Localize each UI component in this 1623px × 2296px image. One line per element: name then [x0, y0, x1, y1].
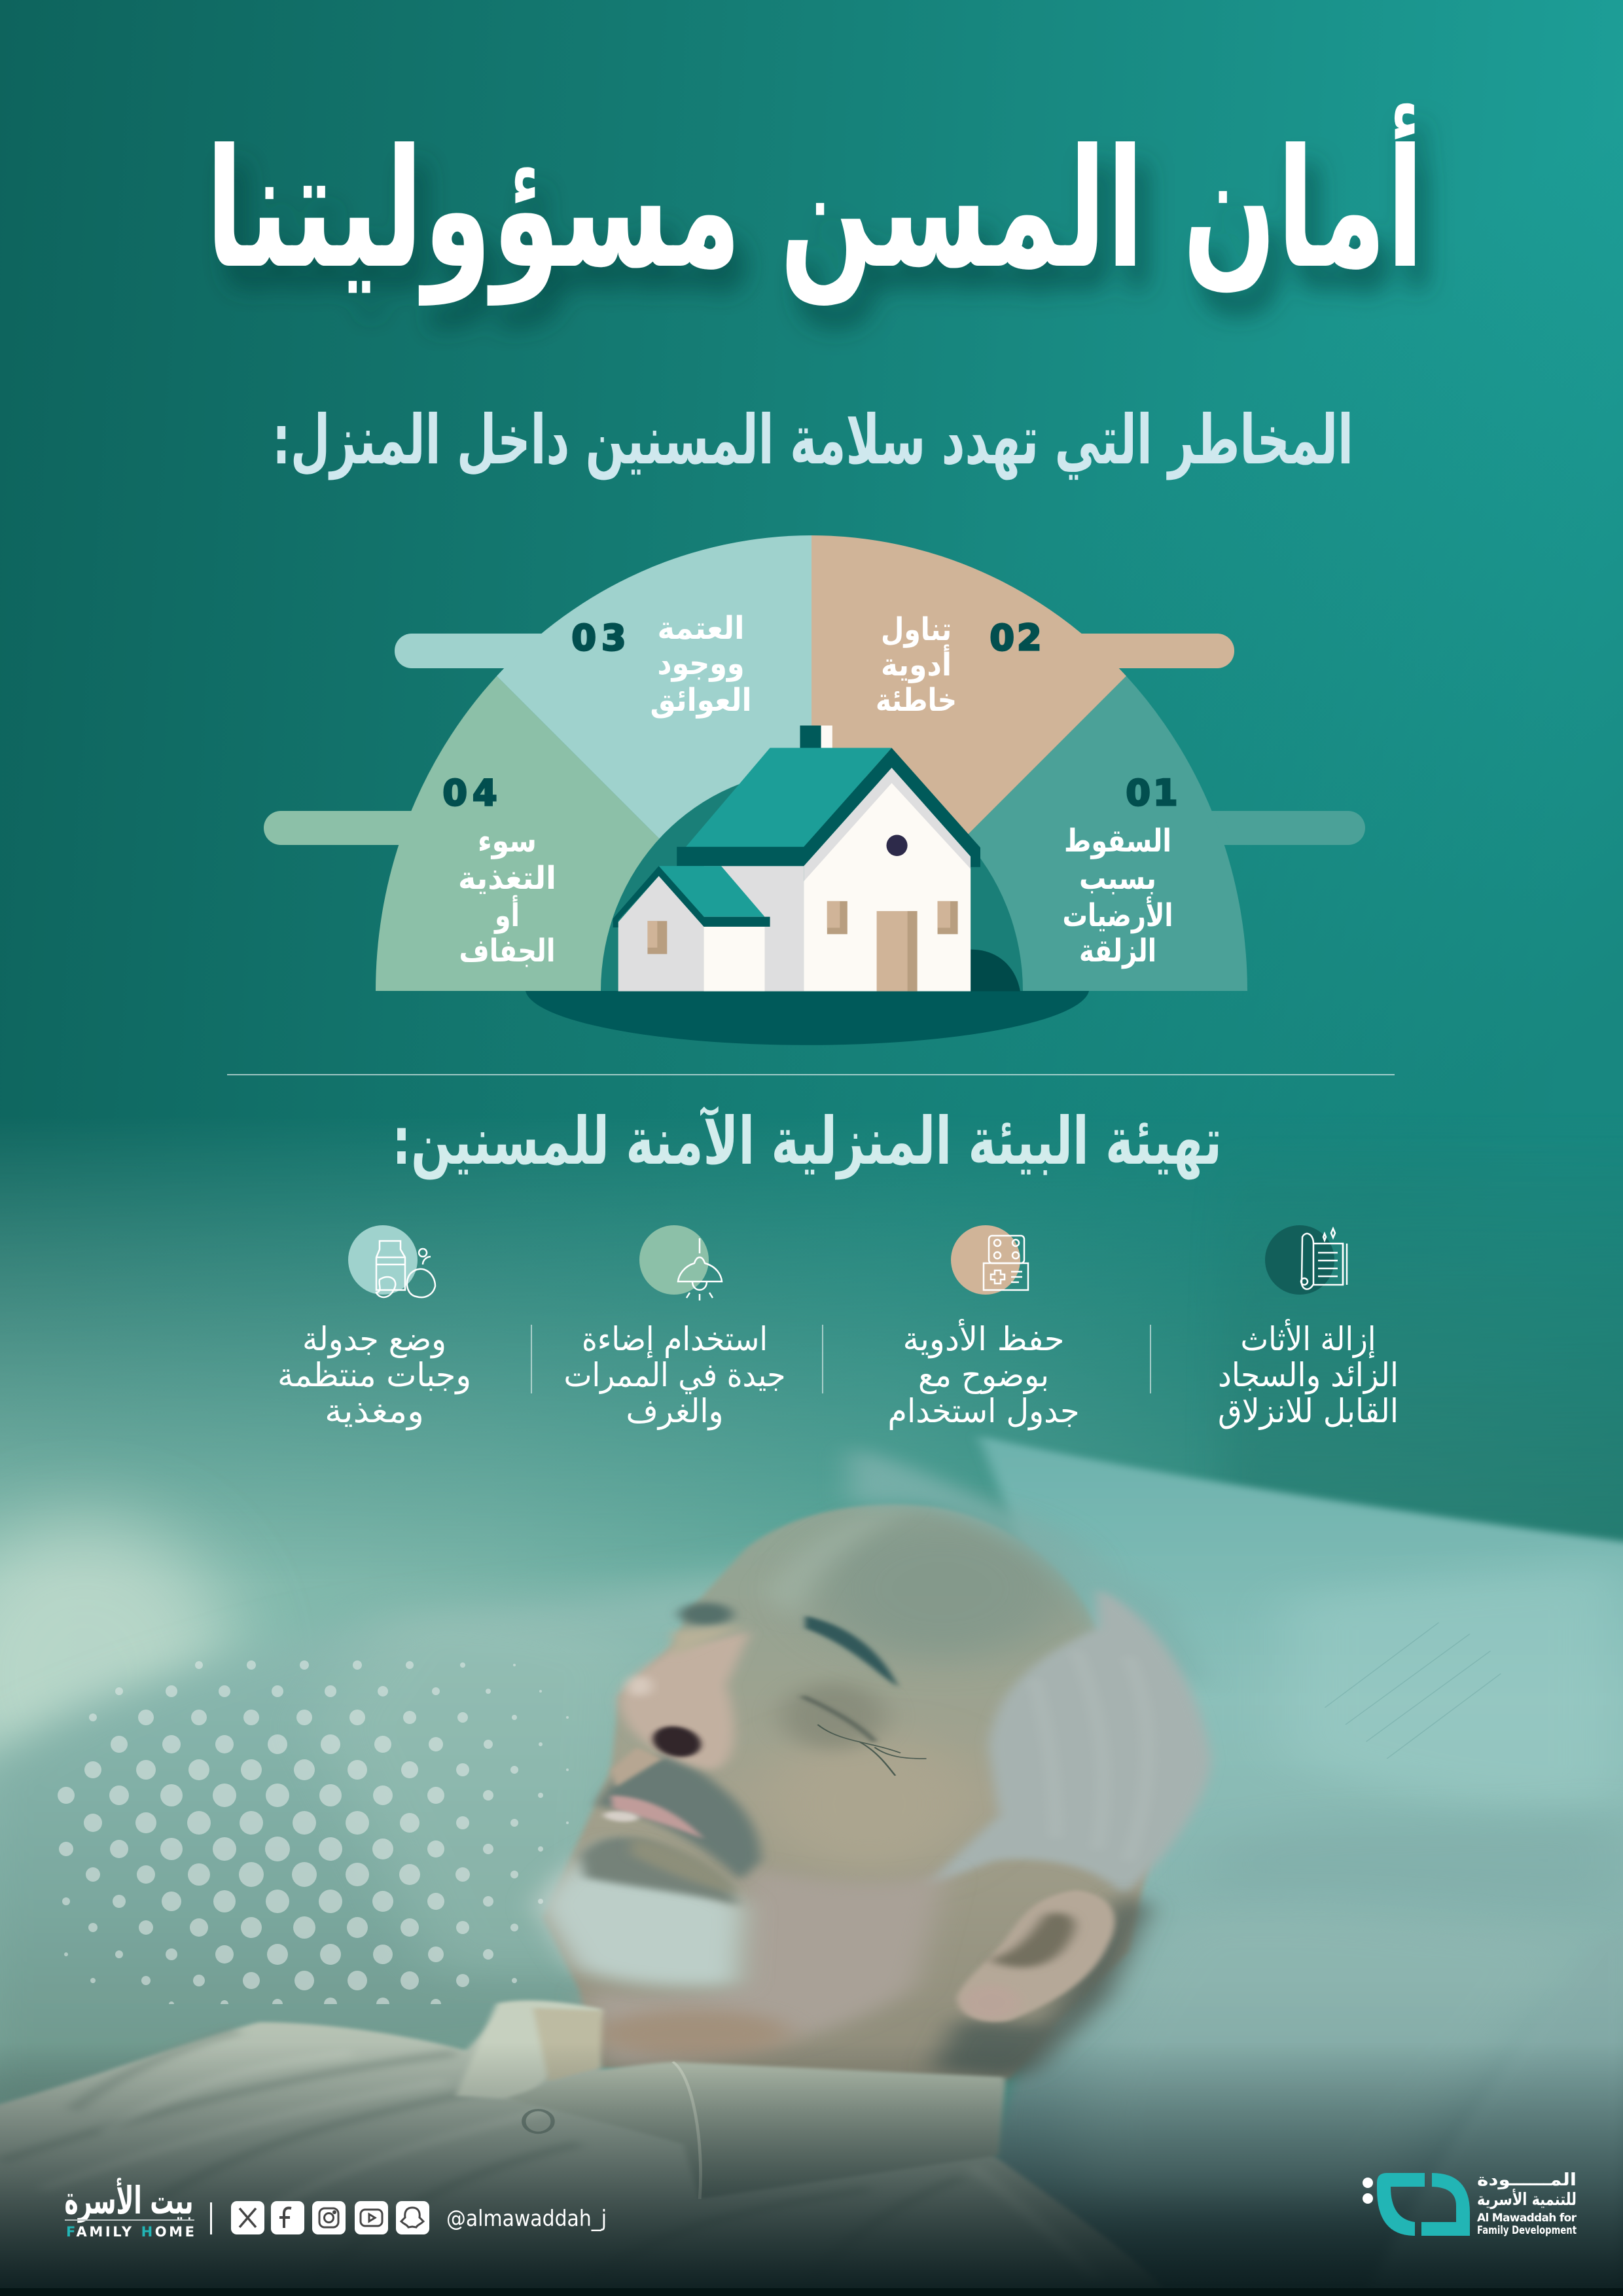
bar 01: [1169, 811, 1365, 845]
bottom dark fade: [0, 2042, 1623, 2288]
icon: rug: [1265, 1225, 1347, 1295]
nostril: [644, 1722, 710, 1761]
text: remove furniture: القابل للانزلاق: [1218, 1392, 1399, 1430]
icon: instagram: [312, 2201, 346, 2234]
bush: [971, 950, 1020, 992]
icon: youtube: [355, 2201, 388, 2234]
label 04: التغذية: [458, 860, 556, 897]
main gable shadow: [804, 768, 971, 992]
far eye socket: [673, 1625, 745, 1657]
neck shadow behind ear: [931, 1895, 1149, 2079]
collar button: [524, 2110, 553, 2132]
label 04: الجفاف: [459, 933, 555, 969]
pillow fold light: [1067, 1910, 1594, 2200]
door: [877, 911, 918, 992]
number 01: 01: [1126, 772, 1181, 814]
text: meals: وجبات منتظمة: [277, 1356, 471, 1395]
hair highlights: [1035, 1651, 1148, 1861]
forehead tone: [813, 1518, 1071, 1659]
eye socket: [781, 1682, 885, 1750]
chimney light side: [821, 726, 832, 748]
footer divider: [210, 2202, 212, 2234]
collar fold: [673, 2062, 701, 2199]
far brow: [679, 1603, 733, 1625]
window left small: [647, 921, 667, 954]
text: remove furniture: [1218, 1319, 1399, 1430]
neck warm: [595, 2010, 792, 2057]
cheek tone: [760, 1736, 978, 1872]
ear: [957, 1890, 1115, 2022]
logo: family home: [64, 2178, 194, 2240]
chin skin patch: [632, 1838, 737, 1895]
window main left: [827, 901, 847, 934]
skin inside collar: [533, 2008, 602, 2082]
text: lighting: والغرف: [626, 1392, 724, 1431]
segment 04: [376, 676, 812, 991]
text: remove furniture: الزائد والسجاد: [1218, 1356, 1399, 1395]
white beard chin: [536, 1844, 745, 1988]
left collar: [455, 2000, 602, 2100]
text: remove furniture: إزالة الأثاث: [1241, 1319, 1376, 1359]
middle wall white: [704, 927, 765, 992]
main roof: [686, 748, 892, 847]
moustache: [595, 1753, 760, 1880]
label 02: تناول: [881, 611, 952, 648]
logo name: للتنمية الأسرية: [1477, 2189, 1577, 2210]
window glow: [0, 1518, 236, 1833]
text: lighting: استخدام إضاءة: [582, 1320, 768, 1359]
house illustration: [613, 726, 1020, 992]
chimney: [800, 726, 821, 748]
label 03: العتمة: [657, 610, 745, 647]
lips: [611, 1795, 704, 1839]
small roof: [659, 866, 765, 917]
text: lighting: جيدة في الممرات: [564, 1356, 785, 1394]
main collar: [505, 2062, 1004, 2199]
logo: family home: بيت الأسرة: [64, 2178, 194, 2223]
ear lobe pink: [963, 1985, 1020, 2019]
blanket highlight fold: [310, 1608, 642, 1974]
label 01: [1063, 823, 1173, 969]
head skin base: [543, 1504, 1180, 2079]
social handle: @almawaddah_j: [446, 2206, 607, 2232]
bottom strip: [0, 2288, 1623, 2296]
photo: sleeping elderly man: [0, 1047, 1623, 2296]
main roof edge: [677, 748, 980, 867]
label 03: [651, 610, 751, 719]
label 01: السقوط: [1064, 823, 1171, 859]
second pillow lower right: [1366, 1926, 1623, 2296]
label 04: سوء: [478, 823, 537, 859]
pillow wrinkles: [1325, 1623, 1501, 1759]
inner teal dome: [601, 770, 1023, 991]
round window: [886, 834, 908, 856]
photo backdrop wall: [0, 1143, 1623, 2126]
nose: [619, 1631, 751, 1770]
bar 04: [264, 811, 460, 845]
pillow highlight: [1283, 1560, 1623, 1807]
side hair: [921, 1588, 1211, 1895]
logo name: [1477, 2170, 1577, 2237]
logo dots: [1363, 2178, 1373, 2204]
main gable: [804, 783, 971, 992]
icon: lamp: [639, 1225, 722, 1300]
shirt: [0, 2008, 1169, 2296]
curtain shadow: [1255, 1462, 1452, 1512]
heading: safe home: تهيئة البيئة المنزلية الآمنة للمسنين:: [392, 1103, 1222, 1180]
logo name: Family Development: [1477, 2224, 1577, 2237]
number 02: 02: [990, 617, 1044, 658]
window main right: [938, 901, 958, 934]
number 04: 04: [442, 772, 503, 814]
small roof edge: [613, 866, 770, 927]
icon: facebook: [271, 2201, 304, 2234]
logo: family home: FAMILY HOME: [66, 2224, 194, 2240]
lower lip light: [602, 1810, 640, 1823]
icon: X: [231, 2201, 264, 2234]
label 02: أدوية: [881, 644, 952, 683]
column dividers: [531, 1325, 1151, 1393]
label 03: ووجود: [657, 645, 745, 682]
label 01: الزلقة: [1079, 933, 1156, 969]
shirt fold lights: [41, 2053, 1097, 2280]
small gable: [618, 876, 704, 992]
segment 01: [812, 676, 1247, 991]
logo: Al Mawaddah: [1363, 2170, 1577, 2237]
middle wall: [704, 866, 804, 992]
temple light: [766, 1503, 911, 1623]
upper lip near: [611, 1748, 662, 1787]
bar 02: [1038, 634, 1234, 668]
side hair wisps: [849, 1447, 1211, 1691]
inner ear: [988, 1913, 1075, 1967]
label 01: بسبب: [1079, 860, 1156, 897]
stubble under lip: [580, 1837, 740, 1906]
segment 02: [812, 535, 1126, 991]
diagram: home risks semicircle: [264, 535, 1365, 1045]
label 02: [876, 611, 957, 719]
label 03: العوائق: [651, 682, 751, 719]
logo mark right: [1421, 2173, 1470, 2236]
label 04: [458, 823, 556, 969]
text: medicine storage: [887, 1319, 1080, 1431]
label 01: الأرضيات: [1063, 896, 1173, 934]
icon: medicine: [951, 1225, 1028, 1295]
eyelid: [802, 1696, 874, 1742]
text: medicine storage: بوضوح مع: [918, 1356, 1049, 1395]
text: lighting: [564, 1320, 785, 1431]
icon: food: [348, 1225, 435, 1297]
pillow fold shadow: [1211, 1810, 1623, 1906]
nose tip highlight: [627, 1676, 652, 1696]
icon: snapchat: [396, 2201, 429, 2234]
text: medicine storage: جدول استخدام: [887, 1392, 1080, 1431]
shirt folds: [0, 2031, 963, 2291]
ground shadow: [526, 991, 1089, 1045]
eyebrow: [805, 1616, 899, 1688]
label 04: أو: [493, 895, 520, 934]
number 03: 03: [571, 617, 632, 658]
logo name: Al Mawaddah for: [1477, 2212, 1577, 2225]
text: medicine storage: حفظ الأدوية: [903, 1319, 1064, 1359]
segment 03: [497, 535, 812, 991]
eye wrinkles: [817, 1725, 927, 1776]
text: meals: ومغذية: [325, 1392, 424, 1431]
logo mark left: [1377, 2173, 1425, 2236]
text: meals: [277, 1320, 471, 1431]
blurred blanket left: [0, 1566, 787, 2121]
divider: [227, 1074, 1395, 1075]
halftone dot pattern: [58, 1660, 569, 2011]
text: meals: وضع جدولة: [302, 1320, 446, 1359]
logo name: المــــــودة: [1477, 2170, 1577, 2190]
jaw stubble: [585, 1866, 947, 2065]
main pillow: [978, 1435, 1623, 2296]
bar 03: [395, 634, 591, 668]
label 02: خاطئة: [876, 682, 957, 719]
